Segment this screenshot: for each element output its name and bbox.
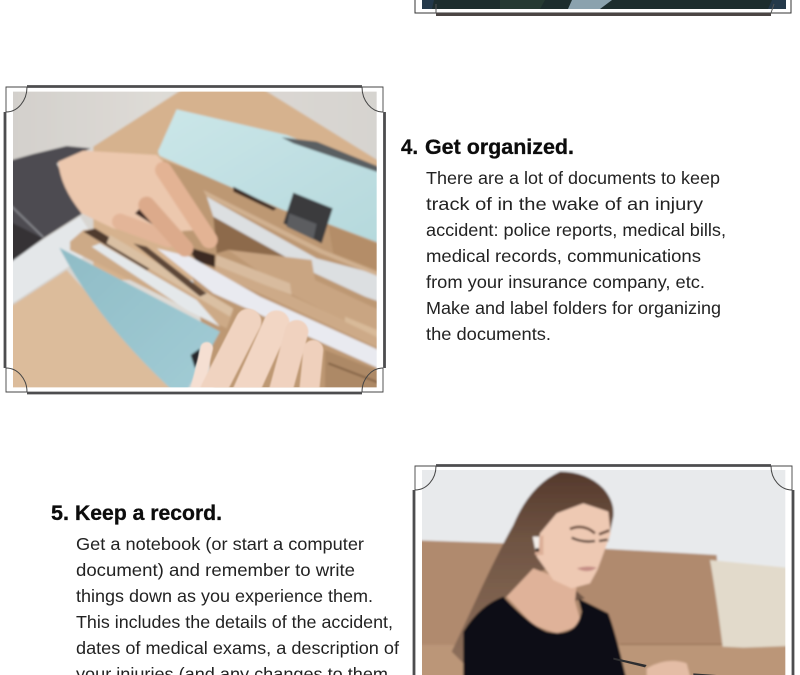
step 5 body text: dates of medical exams, a description of — [76, 638, 399, 658]
step 4 heading: Get organized. — [425, 136, 574, 159]
lower hand — [197, 348, 207, 390]
black top — [463, 597, 630, 675]
step 4 heading: 4. — [401, 136, 418, 159]
sleeve — [13, 144, 90, 240]
tan folders — [231, 250, 376, 329]
back papers — [206, 196, 377, 302]
photo: woman on sofa taking notes — [422, 470, 786, 675]
paper fan — [70, 228, 233, 328]
lower right — [325, 351, 376, 388]
step 5 body text: things down as you experience them. — [76, 586, 373, 606]
step 5 heading: Keep a record. — [75, 502, 222, 525]
front cover — [59, 248, 220, 403]
neck — [507, 568, 582, 633]
step 5 body text: Get a notebook (or start a computer — [76, 534, 364, 554]
hand — [647, 661, 695, 675]
clasp — [283, 193, 333, 243]
panel: photo of previous step, bottom edge — [415, 0, 791, 14]
step 5 body text — [76, 534, 399, 675]
step 5 heading: 5. — [51, 502, 69, 525]
panel: woman writing photo — [407, 455, 800, 675]
folder interior — [164, 160, 377, 388]
step 4 body text: from your insurance company, etc. — [426, 272, 705, 292]
step 4 body text: track of in the wake of an injury — [426, 194, 703, 214]
step 4 body text: medical records, communications — [426, 246, 701, 266]
step 4 body text: the documents. — [426, 324, 551, 344]
hair — [452, 472, 614, 663]
earbud — [533, 537, 539, 550]
upper hand — [58, 151, 200, 233]
photo strip — [422, 0, 786, 9]
step 5 body text: This includes the details of the accident, — [76, 612, 393, 632]
step 5 body text: document) and remember to write — [76, 560, 355, 580]
top cover — [158, 109, 393, 248]
frame — [414, 466, 793, 675]
frame — [5, 86, 384, 393]
step 4 body text: There are a lot of documents to keep — [426, 168, 720, 188]
frame — [415, 0, 791, 14]
step 4 body text: accident: police reports, medical bills, — [426, 220, 726, 240]
step 4 body text — [426, 168, 726, 344]
panel: organized documents photo — [0, 80, 393, 403]
face — [537, 503, 611, 588]
white paper — [156, 248, 377, 369]
photo: hands in file folder — [13, 92, 377, 388]
step 4 body text: Make and label folders for organizing — [426, 298, 721, 318]
pen — [613, 658, 647, 667]
